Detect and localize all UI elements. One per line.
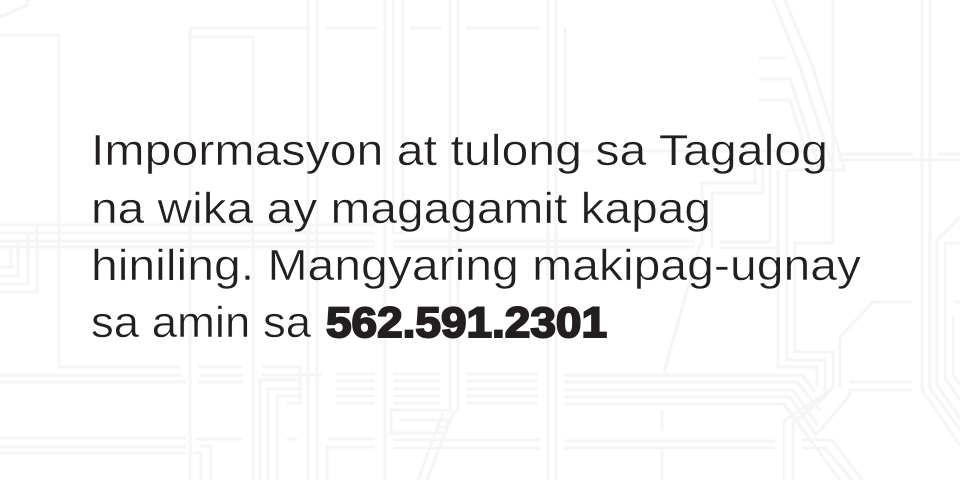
line 4: sa amin sa bbox=[91, 298, 312, 347]
line 2: na wika ay magagamit kapag bbox=[91, 184, 711, 233]
line 1: Impormasyon at tulong sa Tagalog bbox=[91, 126, 828, 175]
phone number: 562.591.2301 bbox=[326, 299, 607, 347]
line 3: hiniling. Mangyaring makipag-ugnay bbox=[91, 241, 861, 290]
